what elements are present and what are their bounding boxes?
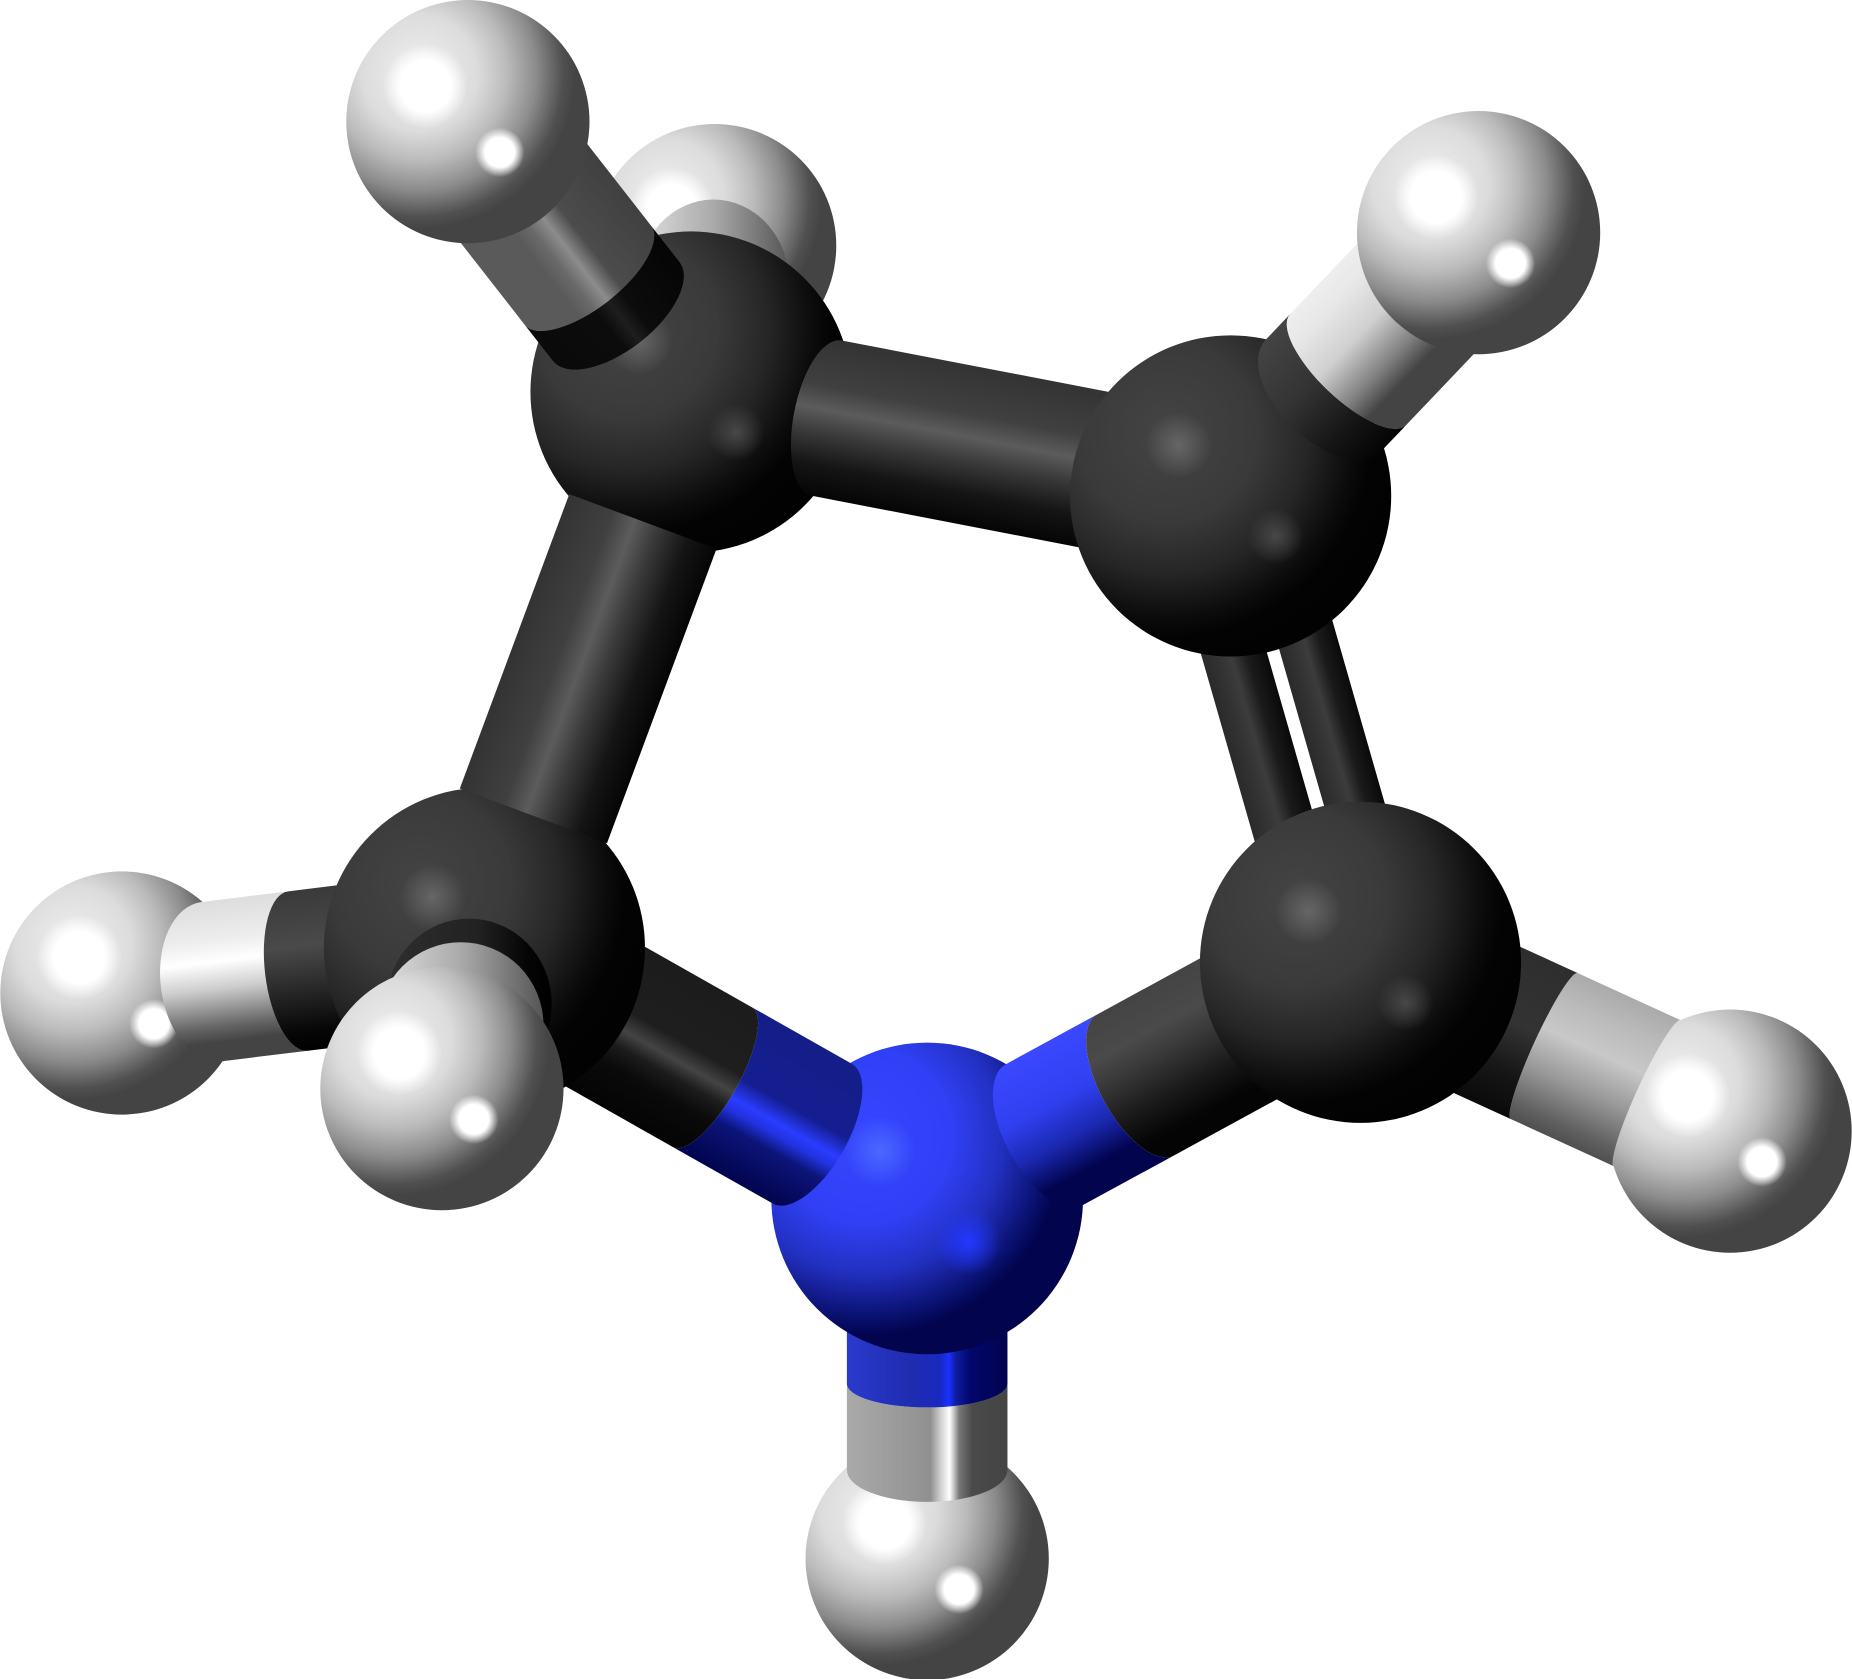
bond: carbon to nitrogen, left bbox=[507, 913, 883, 1221]
carbon atom: top right bbox=[1070, 335, 1391, 656]
bond: double bond strand right bbox=[1275, 617, 1387, 826]
hydrogen atom: front left bbox=[320, 967, 564, 1210]
carbon atom: top left bbox=[530, 231, 852, 553]
bond: double bond strand left bbox=[1200, 634, 1320, 856]
bond: rear hydrogen stub bbox=[638, 200, 789, 365]
bond: carbon to hydrogen, lower right bbox=[1396, 921, 1681, 1166]
bond: carbon to carbon, left side bbox=[460, 494, 716, 843]
bond: carbon to hydrogen, far left bbox=[151, 877, 424, 1068]
hydrogen atom: far left bbox=[0, 871, 244, 1115]
hydrogen atom: bottom bbox=[806, 1437, 1049, 1679]
bond: carbon to carbon, top bbox=[779, 334, 1112, 548]
hydrogen atom: top left bbox=[346, 0, 589, 243]
bond: carbon to hydrogen, top left bbox=[448, 128, 703, 392]
hydrogen atom: upper right bbox=[1357, 111, 1600, 354]
nitrogen atom bbox=[771, 1043, 1083, 1354]
hydrogen atom: rear top bbox=[593, 124, 836, 367]
carbon atom: lower right bbox=[1200, 802, 1521, 1123]
bond: nitrogen to carbon, right bbox=[972, 914, 1357, 1224]
hydrogen atom: lower right bbox=[1608, 1010, 1852, 1253]
nitrogen highlight bbox=[845, 1116, 915, 1187]
bond: carbon to hydrogen, upper right bbox=[1235, 229, 1488, 483]
bond: carbon to hydrogen, front dark ring bbox=[386, 919, 552, 1089]
carbon atom: left bbox=[324, 788, 645, 1109]
bond: carbon to hydrogen, front light section bbox=[378, 942, 543, 1108]
bond: nitrogen to hydrogen bbox=[847, 1317, 1007, 1502]
